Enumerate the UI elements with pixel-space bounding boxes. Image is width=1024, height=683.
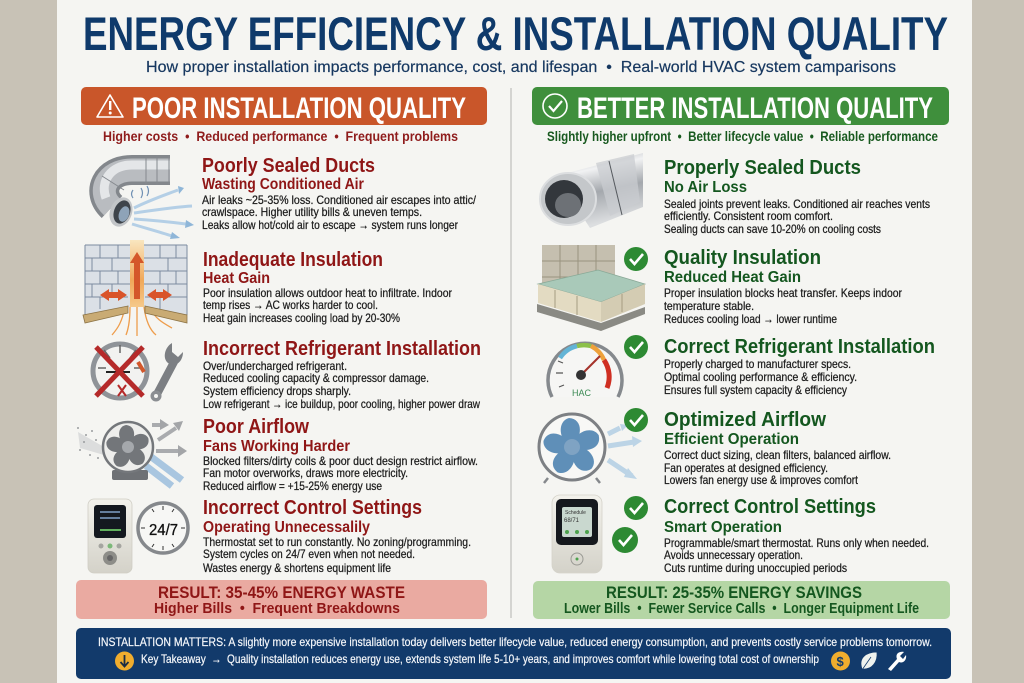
better tagline: Slightly higher upfront • Better lifecycle value • Reliable performance (547, 128, 938, 144)
poor banner: POOR INSTALLATION QUALITY (132, 92, 466, 125)
item: quality insulation: Reduces cooling load → lower runtime (664, 312, 837, 326)
item: optimized airflow: Optimized Airflow (664, 409, 826, 431)
item: quality insulation: Quality Insulation (664, 247, 821, 269)
result: energy waste: RESULT: 35-45% ENERGY WASTE (158, 583, 405, 602)
item: poorly sealed ducts (102, 155, 477, 239)
item: correct control settings: Smart Operation (664, 519, 782, 536)
item: inadequate insulation: Inadequate Insulation (203, 249, 383, 271)
result: energy savings: RESULT: 25-35% ENERGY SAVINGS (606, 583, 862, 602)
item: properly sealed ducts (540, 153, 930, 236)
item: incorrect refrigerant installation: System efficiency drops sharply. (203, 384, 351, 398)
item: inadequate insulation: Poor insulation allows outdoor heat to infiltrate. Indoor (203, 286, 452, 300)
item: correct refrigerant installation: Correct Refrigerant Installation (664, 336, 935, 358)
icon: thermostat and 24/7 clock (88, 499, 188, 573)
item: correct control settings: Cuts runtime during unoccupied periods (664, 561, 847, 575)
icon: dollar coin (831, 652, 850, 670)
item: correct refrigerant installation: Ensures full system capacity & efficiency (664, 383, 847, 397)
item: poor airflow: Fans Working Harder (203, 438, 350, 455)
better banner (532, 87, 949, 125)
item: properly sealed ducts: No Air Loss (664, 179, 747, 196)
item: optimized airflow: Correct duct sizing, clean filters, balanced airflow. (664, 448, 891, 462)
icon: HVAC gauge (548, 335, 648, 398)
item: incorrect refrigerant installation: Over/undercharged refrigerant. (203, 359, 347, 373)
item: correct refrigerant installation: Properly charged to manufacturer specs. (664, 357, 851, 371)
item: properly sealed ducts: efficiently. Consistent room comfort. (664, 209, 833, 223)
icon: wrench (888, 652, 906, 671)
result: energy waste (76, 580, 487, 619)
item: incorrect refrigerant installation: Incorrect Refrigerant Installation (203, 338, 481, 360)
icon: thermostat and 24/7 clock: 24/7 (149, 522, 178, 539)
icon: leaking duct (102, 155, 194, 239)
item: incorrect control settings: System cycles on 24/7 even when not needed. (203, 547, 415, 561)
item: incorrect refrigerant installation (93, 338, 481, 411)
item: inadequate insulation: temp rises → AC works harder to cool. (203, 298, 378, 312)
poor tagline: Higher costs • Reduced performance • Frequent problems (103, 128, 458, 144)
item: poor airflow (77, 416, 478, 493)
item: poor airflow: Blocked filters/dirty coils & poor duct design restrict airflow. (203, 454, 478, 468)
item: correct control settings (552, 495, 929, 575)
icon: insulation blocks (537, 245, 648, 331)
column divider (510, 88, 512, 618)
item: inadequate insulation (83, 240, 452, 336)
icon: leaf (861, 652, 877, 670)
item: incorrect refrigerant installation: Low refrigerant → ice buildup, poor cooling, higher power draw (203, 397, 480, 411)
item: poor airflow: Poor Airflow (203, 416, 309, 438)
item: correct control settings: Avoids unnecessary operation. (664, 548, 803, 562)
item: incorrect control settings: Thermostat set to run constantly. No zoning/programming. (203, 535, 471, 549)
item: poorly sealed ducts: crawlspace. Higher utility bills & uneven temps. (202, 205, 422, 219)
icon: smart thermostat: 68/71 (564, 518, 580, 524)
result: energy waste: Higher Bills • Frequent Breakdowns (154, 600, 400, 617)
icon: brick wall with heat (83, 240, 187, 336)
icon: dollar coin: $ (836, 654, 844, 669)
item: incorrect control settings: Wastes energy & shortens equipment life (203, 561, 391, 575)
item: optimized airflow: Fan operates at designed efficiency. (664, 461, 828, 475)
item: properly sealed ducts: Properly Sealed Ducts (664, 157, 861, 179)
item: poor airflow: Fan motor overworks, draws more electricity. (203, 466, 408, 480)
subtitle: How proper installation impacts performance, cost, and lifespan • Real-world HVAC system camparisons (146, 59, 896, 76)
item: poorly sealed ducts: Air leaks ~25-35% loss. Conditioned air escapes into attic/ (202, 193, 477, 207)
item: incorrect control settings: Incorrect Control Settings (203, 497, 422, 519)
item: poorly sealed ducts: Poorly Sealed Ducts (202, 155, 375, 177)
item: correct refrigerant installation: Optimal cooling performance & efficiency. (664, 370, 857, 384)
icon: efficient fan (539, 408, 648, 483)
icon: dusty fan (77, 419, 187, 486)
poor banner (81, 87, 487, 125)
item: optimized airflow: Lowers fan energy use & improves comfort (664, 473, 859, 487)
item: poorly sealed ducts: Wasting Conditioned Air (202, 176, 364, 193)
icon: down arrow (115, 652, 134, 670)
item: inadequate insulation: Heat Gain (203, 270, 270, 287)
item: quality insulation: temperature stable. (664, 299, 754, 313)
item: correct control settings: Programmable/smart thermostat. Runs only when needed. (664, 536, 929, 550)
item: optimized airflow: Efficient Operation (664, 431, 799, 448)
icon: HVAC gauge: HAC (572, 388, 591, 398)
item: poor airflow: Reduced airflow = +15-25% energy use (203, 479, 382, 493)
item: poorly sealed ducts: Leaks allow hot/cold air to escape → system runs longer (202, 218, 458, 232)
item: correct refrigerant installation (548, 335, 935, 398)
icon: sealed duct (540, 153, 643, 228)
item: properly sealed ducts: Sealing ducts can save 10-20% on cooling costs (664, 222, 881, 236)
icon: smart thermostat (552, 495, 648, 573)
item: quality insulation (537, 245, 902, 331)
item: incorrect control settings (88, 497, 471, 575)
item: quality insulation: Reduced Heat Gain (664, 269, 801, 286)
item: quality insulation: Proper insulation blocks heat transfer. Keeps indoor (664, 286, 902, 300)
item: properly sealed ducts: Sealed joints prevent leaks. Conditioned air reaches vents (664, 197, 930, 211)
footer: key takeaway bar: Key Takeaway → Quality installation reduces energy use, extends system life 5-10+ years, and improves comfort while lowering total cost of ownership (141, 652, 819, 666)
icon: smart thermostat: Schedule (565, 510, 586, 516)
item: incorrect control settings: Operating Unnecessalily (203, 519, 370, 536)
panel: poor installation quality (76, 87, 487, 619)
item: correct control settings: Correct Control Settings (664, 496, 876, 518)
footer: key takeaway bar (76, 628, 951, 679)
result: energy savings (533, 581, 950, 619)
item: optimized airflow (539, 408, 891, 487)
icon: crossed gauge and wrench (93, 343, 183, 402)
result: energy savings: Lower Bills • Fewer Service Calls • Longer Equipment Life (564, 600, 919, 617)
item: inadequate insulation: Heat gain increases cooling load by 20-30% (203, 311, 400, 325)
item: incorrect refrigerant installation: Reduced cooling capacity & compressor damage. (203, 371, 429, 385)
panel: better installation quality (532, 87, 950, 619)
